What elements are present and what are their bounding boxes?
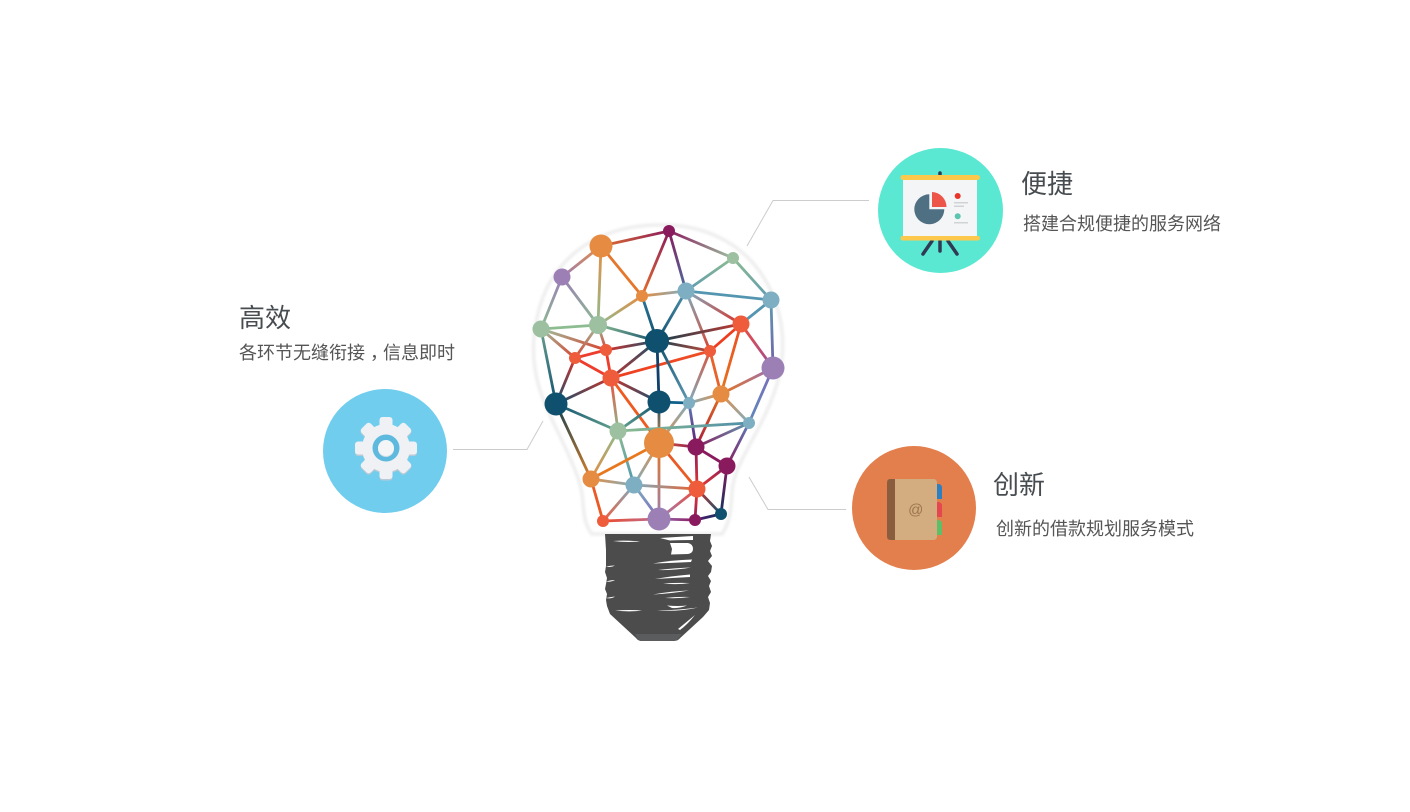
bulb screw base bbox=[605, 534, 712, 641]
connector: top right bbox=[747, 200, 869, 246]
circle: address book icon badge bbox=[852, 446, 976, 570]
icon: address book: @ bbox=[908, 502, 923, 518]
connector: left bbox=[453, 421, 543, 450]
text: 创新 description: 创新的借款规划服务模式 bbox=[996, 519, 1194, 539]
text: 高效 description: 各环节无缝衔接 ，信息即时 bbox=[239, 343, 455, 363]
bulb network edges bbox=[541, 231, 773, 521]
heading: 便捷: 便捷 bbox=[1021, 169, 1073, 199]
text: 便捷 description: 搭建合规便捷的服务网络 bbox=[1023, 214, 1221, 234]
bulb network nodes bbox=[532, 225, 784, 530]
icon: presentation board bbox=[900, 173, 980, 254]
heading: 高效: 高效 bbox=[239, 303, 291, 333]
connector: bottom right bbox=[749, 477, 846, 510]
heading: 创新: 创新 bbox=[993, 470, 1045, 500]
circle: presentation icon badge bbox=[878, 148, 1003, 273]
circle: gear icon badge bbox=[323, 389, 447, 513]
bulb halo outline bbox=[534, 225, 783, 534]
icon: gear bbox=[355, 417, 417, 480]
